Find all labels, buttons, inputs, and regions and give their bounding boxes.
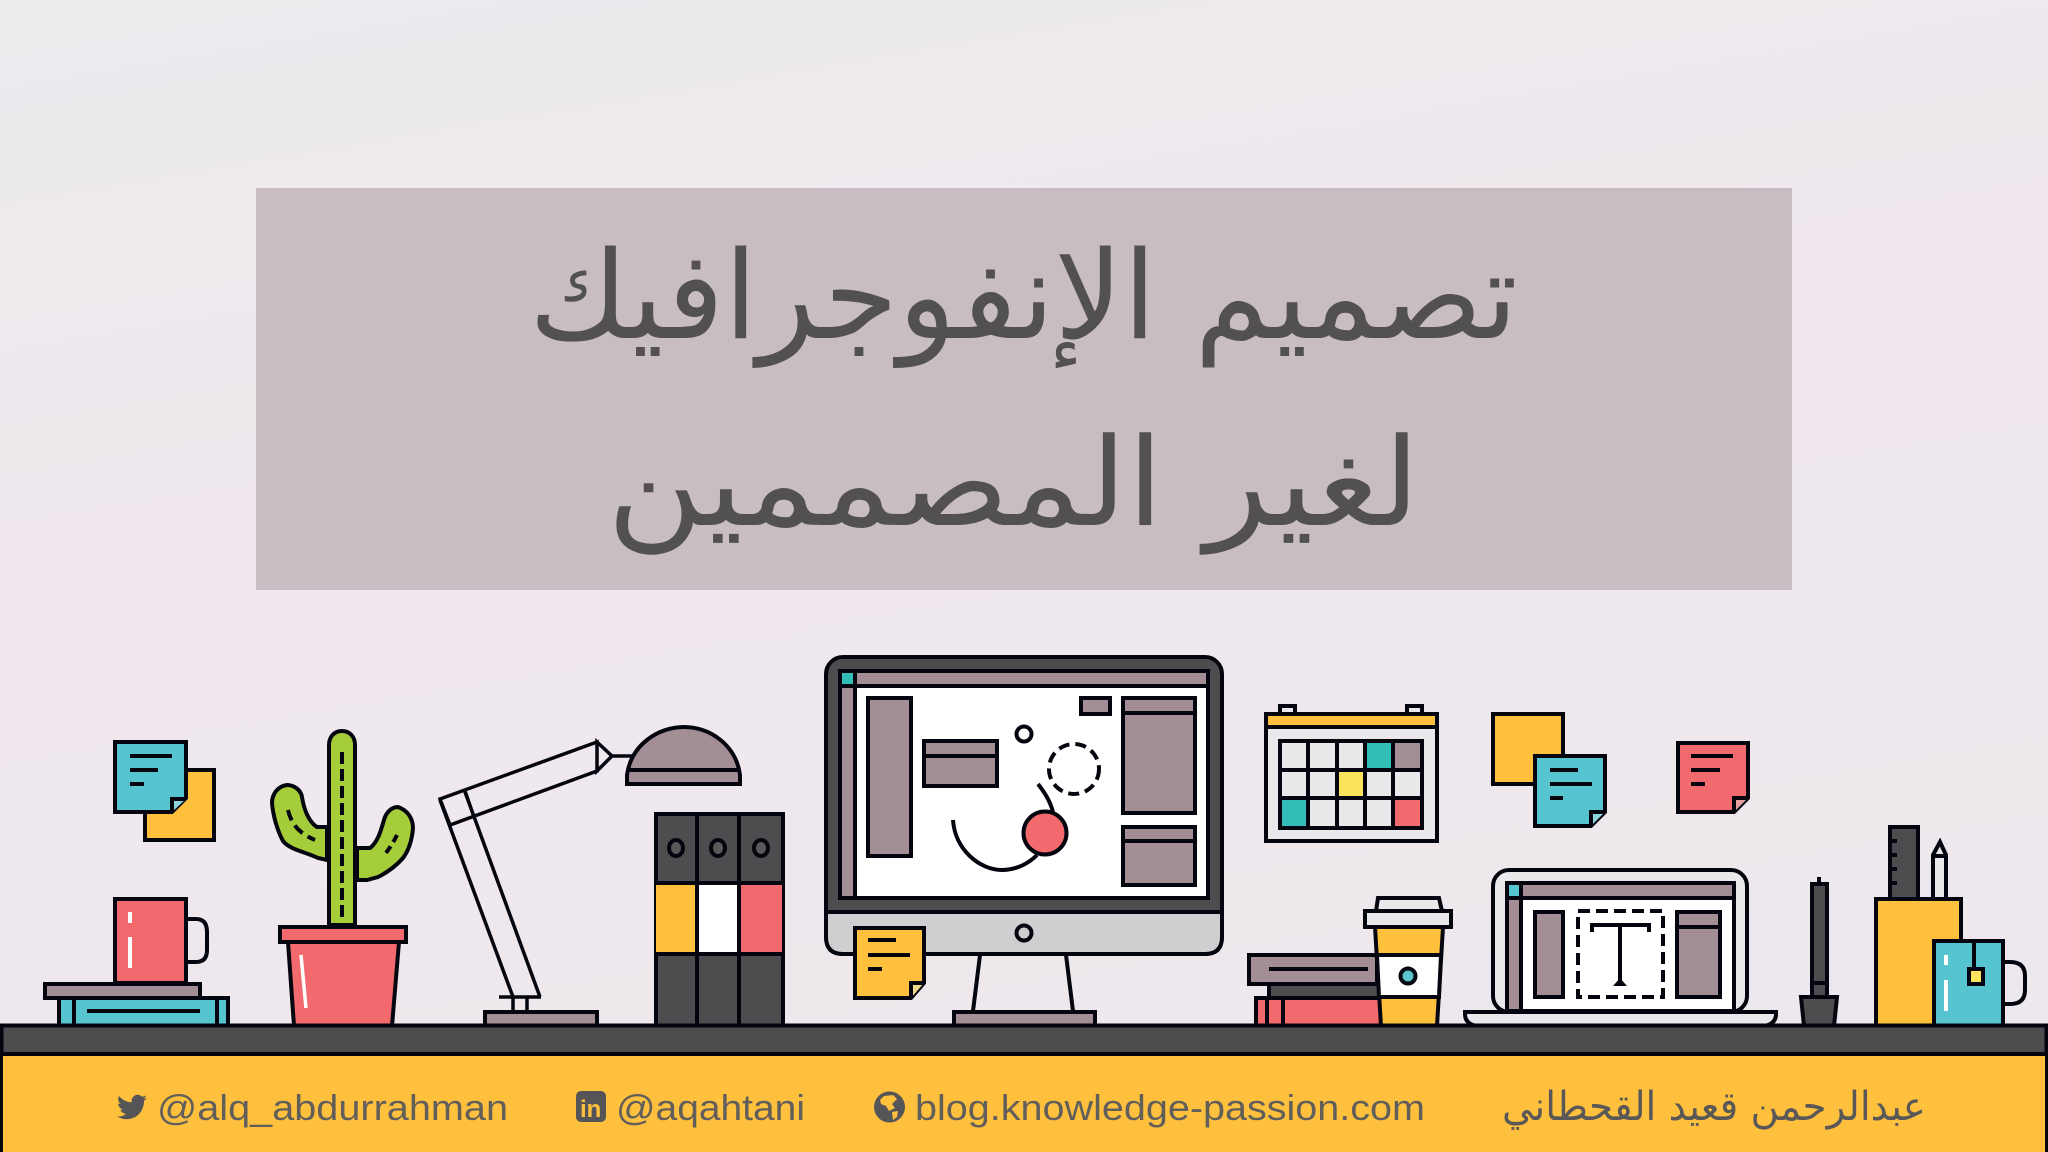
sticky notes: blue over yellow <box>115 742 214 840</box>
twitter handle: @alq_abdurrahman <box>157 1087 508 1128</box>
icon: text tool T <box>1592 925 1649 986</box>
wall calendar <box>1266 706 1437 841</box>
cactus in pot <box>272 731 413 1026</box>
screen panels <box>868 698 1195 885</box>
red sticky note <box>1678 743 1748 812</box>
desk lamp <box>440 727 740 1026</box>
desktop monitor <box>826 657 1222 1026</box>
title line 2: لغير المصممين <box>607 412 1420 555</box>
pen in holder <box>1801 877 1837 1026</box>
icon: linkedin <box>576 1091 606 1123</box>
footer band <box>0 1054 2048 1152</box>
desk top <box>2 1026 2046 1054</box>
icon: linkedin: in <box>580 1096 601 1123</box>
book stack <box>1249 955 1382 1026</box>
monitor stand <box>973 955 1073 1011</box>
laptop <box>1465 870 1776 1026</box>
sticky notes: yellow and blue <box>1493 714 1605 826</box>
binders <box>656 814 783 1026</box>
pen cup with ruler, pencil and blue mug <box>1876 827 2025 1026</box>
author name: عبدالرحمن قعيد القحطاني <box>1502 1084 1926 1130</box>
yellow sticky note on monitor <box>855 928 924 998</box>
title banner <box>256 188 1792 590</box>
red mug on books <box>45 899 228 1026</box>
icon: globe <box>874 1092 905 1122</box>
blog address: blog.knowledge-passion.com <box>915 1087 1425 1128</box>
icon: twitter bird <box>117 1095 147 1119</box>
title line 1: تصميم الإنفوجرافيك <box>529 225 1518 368</box>
linkedin handle: @aqahtani <box>616 1087 805 1128</box>
coffee cup <box>1365 898 1451 1026</box>
